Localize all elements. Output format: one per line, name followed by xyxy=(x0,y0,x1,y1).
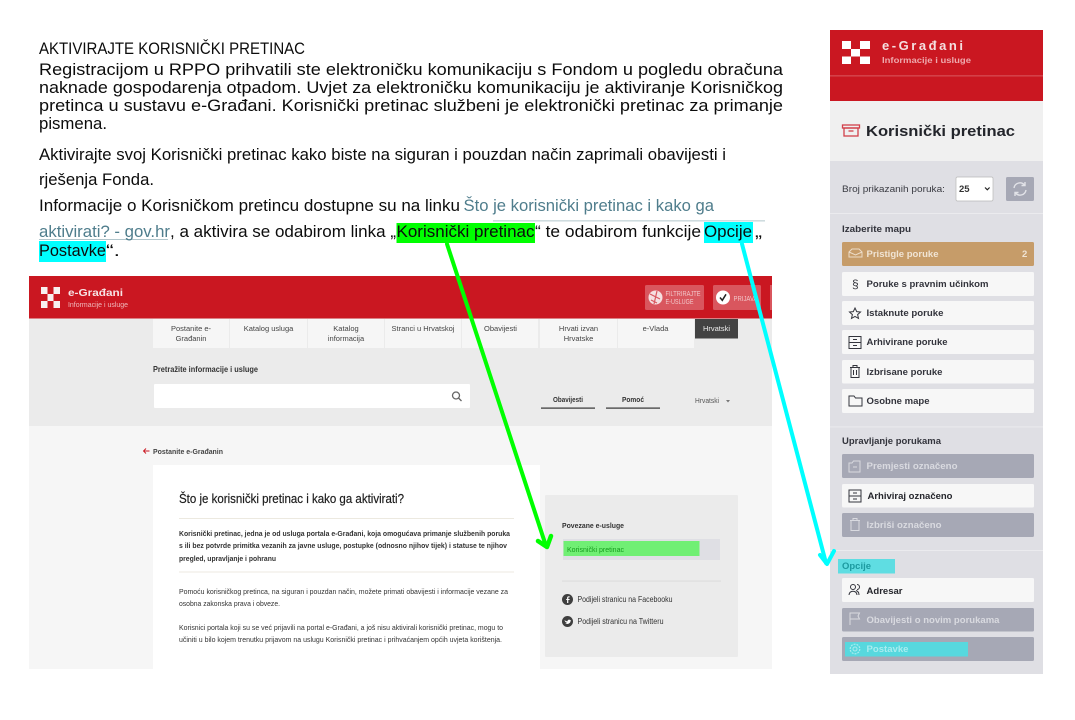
article lead: Korisnički pretinac, jedna je od usluga portala e-Građani, koja omogućava primanje službenih poruka xyxy=(179,529,511,538)
paragraph: link and highlighted terms: “. xyxy=(106,241,120,260)
paragraph: registration: naknade gospodarenja otpadom. Uvjet za elektroničku komunikaciju je aktiviranje Korisničkog xyxy=(39,78,783,97)
section: choose folder xyxy=(842,224,1034,413)
arrow: green, to Korisnički pretinac link xyxy=(447,244,551,547)
share on Facebook: Podijeli stranicu na Facebooku xyxy=(578,595,672,604)
sidebar title xyxy=(830,101,1043,161)
share on Twitter: Podijeli stranicu na Twitteru xyxy=(578,617,664,626)
highlighted service link xyxy=(564,541,700,556)
navigation tabs xyxy=(153,319,738,348)
links: notices, help, language: Obavijesti xyxy=(553,395,583,404)
article title: Što je korisnički pretinac i kako ga aktivirati? xyxy=(179,491,404,506)
button: deleted messages xyxy=(842,360,1034,384)
button: delete selected: Izbriši označeno xyxy=(866,520,942,530)
button: settings: Postavke xyxy=(866,644,908,654)
arrow: cyan, to Opcije and Postavke xyxy=(742,244,834,564)
section: manage messages: Upravljanje porukama xyxy=(842,436,942,446)
paragraph: link and highlighted terms: Opcije xyxy=(704,222,752,241)
search bar: Pretražite informacije i usluge xyxy=(153,364,258,374)
related services panel: Povezane e-usluge xyxy=(562,521,624,530)
links: notices, help, language: Hrvatski xyxy=(695,396,719,405)
navigation tabs: e-Vlada xyxy=(643,324,669,333)
button: address book xyxy=(842,578,1034,602)
navigation tabs: Građanin xyxy=(176,334,206,343)
paragraph: registration xyxy=(39,60,784,133)
paragraph: link and highlighted terms: aktivirati? - gov.hr xyxy=(39,222,170,241)
highlighted service link: Korisnički pretinac xyxy=(567,545,624,554)
messages per page control: 25 xyxy=(959,184,970,195)
related services panel xyxy=(545,495,738,657)
text block: instructions xyxy=(39,39,784,262)
navigation tabs: Hrvatski xyxy=(703,324,730,333)
navigation tabs: Hrvatske xyxy=(564,334,593,343)
navigation tabs: Stranci u Hrvatskoj xyxy=(392,324,455,333)
paragraph: activate: Aktivirajte svoj Korisnički pretinac kako biste na siguran i pouzdan način zaprimali obavijesti i xyxy=(39,145,726,164)
article body: učiniti u bilo kojem trenutku prijavom na uslugu Korisnički pretinac i prihvaćanjem općih uvjeta korištenja. xyxy=(179,635,502,644)
navigation tabs: Katalog usluga xyxy=(244,324,294,333)
paragraph: link and highlighted terms: , a aktivira se odabirom linka „ xyxy=(170,222,396,241)
paragraph: registration: pismena. xyxy=(39,114,107,133)
icon: magnifier xyxy=(452,392,462,401)
button: login xyxy=(713,285,761,310)
button: move selected: Premjesti označeno xyxy=(866,461,958,471)
site header xyxy=(29,276,772,318)
article body xyxy=(179,587,508,644)
icon: sidebar logo xyxy=(842,41,870,64)
article card xyxy=(153,465,540,669)
navigation tabs: Obavijesti xyxy=(484,324,517,333)
site header: Informacije i usluge xyxy=(68,302,128,309)
button: new message notifications xyxy=(842,608,1034,632)
article lead: pregled, upravljanje i pohranu xyxy=(179,554,276,563)
search bar xyxy=(153,364,470,408)
button: legal messages xyxy=(842,272,1034,296)
button: archived messages: Arhivirane poruke xyxy=(866,337,948,347)
button: inbox: Pristigle poruke xyxy=(866,249,938,259)
paragraph: link and highlighted terms: Što je korisnički pretinac i kako ga xyxy=(464,196,715,215)
paragraph: link and highlighted terms: Informacije o Korisničkom pretincu dostupne su na linku xyxy=(39,196,460,215)
navigation tabs: Katalog xyxy=(333,324,359,333)
button: archived messages xyxy=(842,330,1034,354)
sidebar header: Informacije i usluge xyxy=(882,55,971,65)
button: move selected xyxy=(842,454,1034,478)
button: inbox: 2 xyxy=(1022,249,1027,260)
icon: inbox box xyxy=(842,125,860,136)
site header: e-Građani xyxy=(68,287,123,299)
breadcrumb: Postanite e-Građanin xyxy=(153,447,223,456)
navigation tabs: Postanite e- xyxy=(171,324,212,333)
button: login: PRIJAVA xyxy=(734,296,758,303)
links: notices, help, language xyxy=(541,395,730,409)
section: options xyxy=(838,559,1034,661)
navigation tabs: Hrvati izvan xyxy=(559,324,598,333)
section: choose folder: Izaberite mapu xyxy=(842,224,911,234)
paragraph: link and highlighted terms: „ xyxy=(755,222,762,241)
highlighted heading: options xyxy=(838,559,895,574)
paragraph: registration: pretinca u sustavu e-Građani. Korisnički pretinac službeni je elektronički pretinac za primanje xyxy=(39,96,783,115)
icon: site logo xyxy=(41,287,60,308)
messages per page control: Broj prikazanih poruka: xyxy=(842,184,945,194)
button: inbox xyxy=(842,242,1034,266)
section: manage messages xyxy=(842,436,1034,537)
article body: Pomoću korisničkog pretinca, na siguran i pouzdan način, možete primati obavijesti i informacije vezane za xyxy=(179,587,508,596)
share on Facebook xyxy=(562,594,672,605)
paragraph: link and highlighted terms: Postavke xyxy=(39,241,106,260)
article lead xyxy=(179,529,511,563)
button: personal folders: Osobne mape xyxy=(866,396,930,406)
button: archive selected xyxy=(842,484,1034,508)
links: notices, help, language: Pomoć xyxy=(622,395,644,404)
article lead: s ili bez potvrde primitka vezanih za javne usluge, postupke (odnosno njihov tijek) i statuse te njihov xyxy=(179,541,508,550)
paragraph: activate xyxy=(39,145,726,189)
sidebar header xyxy=(830,30,1043,101)
button: new message notifications: Obavijesti o novim porukama xyxy=(866,615,1001,625)
sidebar title: Korisnički pretinac xyxy=(866,123,1015,140)
button: archive selected: Arhiviraj označeno xyxy=(868,491,953,501)
navigation tabs: informacija xyxy=(328,334,365,343)
paragraph: link and highlighted terms: “ te odabirom funkcije xyxy=(535,222,701,241)
article body: osobna zakonska prava i obveze. xyxy=(179,599,280,608)
share on Twitter xyxy=(562,616,664,627)
button: legal messages: Poruke s pravnim učinkom xyxy=(866,279,988,289)
sidebar header: e-Građani xyxy=(882,38,963,53)
article body: Korisnici portala koji su se već prijavili na portal e-Građani, a još nisu aktivirali korisnički pretinac, mogu to xyxy=(179,623,503,632)
button: filter e-services: FILTRIRAJTE xyxy=(666,291,701,298)
button: personal folders xyxy=(842,389,1034,413)
messages per page control xyxy=(842,177,1034,201)
panel: Korisnički pretinac sidebar xyxy=(830,30,1043,674)
heading: AKTIVIRAJTE KORISNIČKI PRETINAC xyxy=(39,39,305,58)
button: refresh xyxy=(1006,177,1034,201)
paragraph: link and highlighted terms: Korisnički pretinac xyxy=(396,222,535,241)
button: address book: Adresar xyxy=(866,586,903,597)
paragraph: registration: Registracijom u RPPO prihvatili ste elektroničku komunikaciju s Fondom u pogledu obračuna xyxy=(39,60,784,79)
button: delete selected xyxy=(842,513,1034,537)
button: filter e-services xyxy=(645,285,704,310)
button: deleted messages: Izbrisane poruke xyxy=(866,367,942,377)
button: starred messages xyxy=(842,301,1034,325)
button: settings xyxy=(842,637,1034,661)
button: legal messages: § xyxy=(852,277,859,291)
paragraph: activate: rješenja Fonda. xyxy=(39,170,154,189)
button: filter e-services: E-USLUGE xyxy=(666,299,694,306)
highlighted heading: options: Opcije xyxy=(842,561,871,571)
paragraph: link and highlighted terms xyxy=(39,196,765,262)
panel: e-Građani web page screenshot xyxy=(29,276,772,669)
button: starred messages: Istaknute poruke xyxy=(866,308,944,318)
